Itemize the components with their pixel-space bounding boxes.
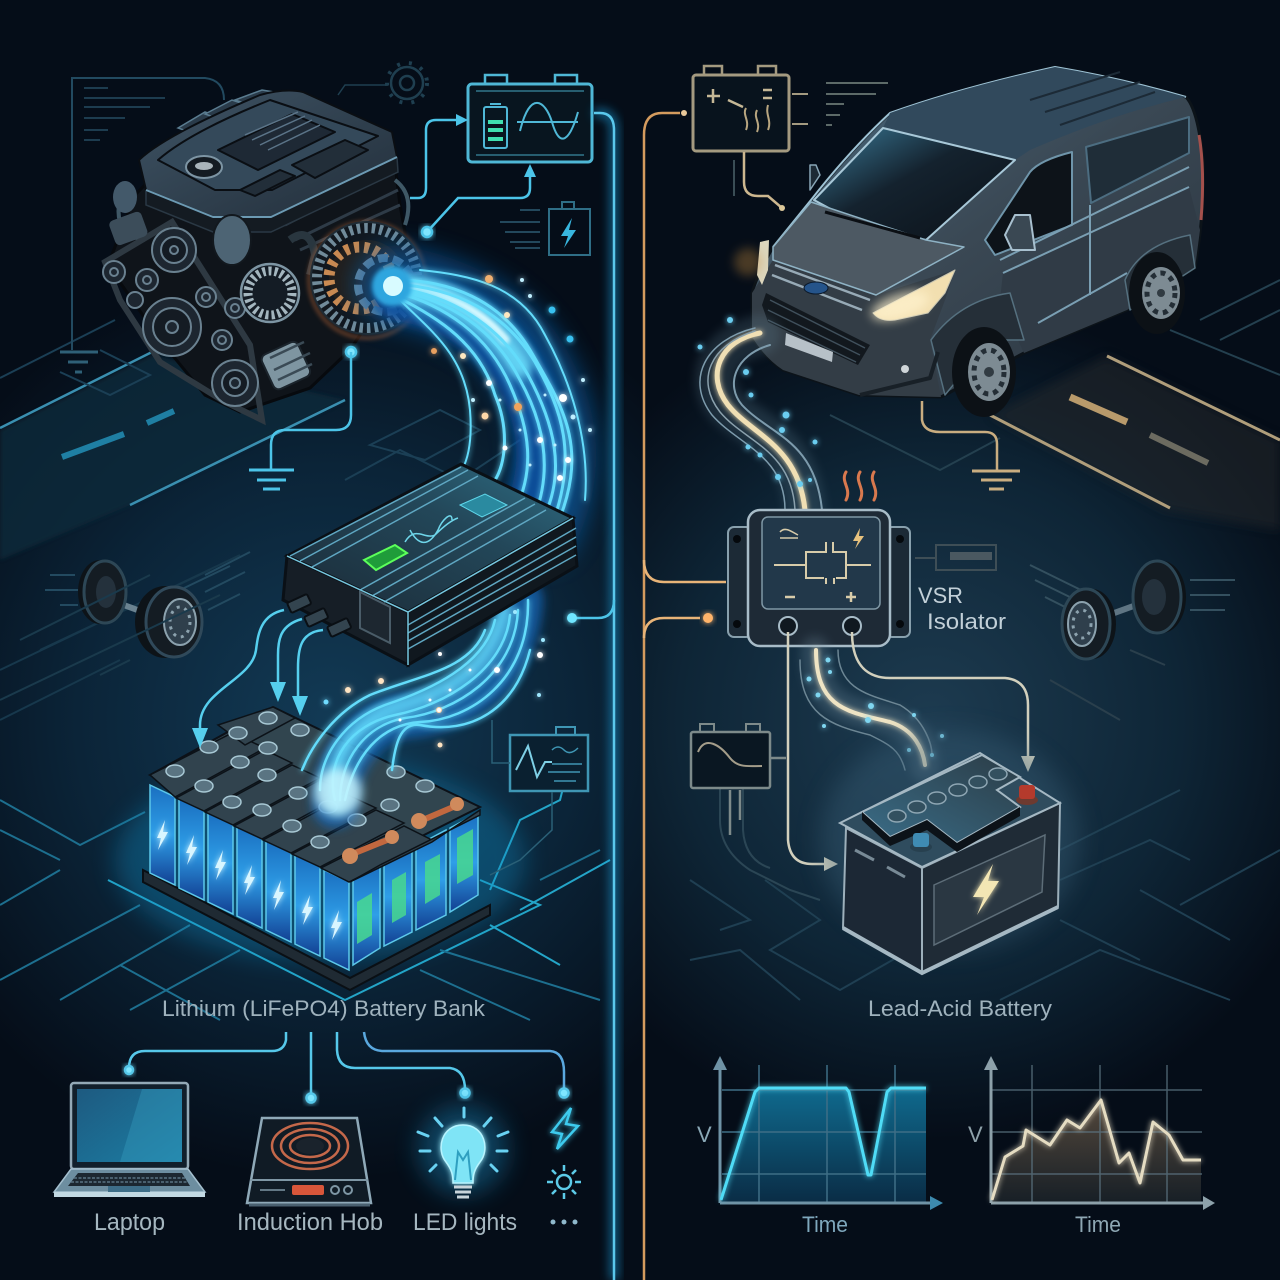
alternator — [311, 222, 423, 334]
chart: lithium voltage: Time — [802, 1212, 848, 1237]
base — [143, 870, 490, 990]
chart: lithium voltage — [697, 1056, 943, 1237]
road and circuit traces left — [0, 320, 610, 1020]
VSR isolator label — [918, 583, 1006, 634]
VSR isolator label: VSR — [918, 583, 963, 608]
VSR isolator — [728, 510, 910, 646]
icon: induction hob — [247, 1118, 371, 1205]
battery outline icon — [460, 494, 507, 517]
left cells — [150, 785, 349, 970]
screen — [762, 517, 880, 609]
icon: laptop — [54, 1083, 205, 1197]
ribs — [290, 467, 576, 649]
load labels — [94, 1209, 517, 1236]
wires from isolator — [788, 632, 1035, 871]
battery right face — [922, 803, 1060, 973]
connector to ground left — [249, 347, 356, 489]
main blue line — [567, 113, 614, 1280]
lead-acid battery — [820, 730, 1080, 973]
headlights — [873, 270, 955, 320]
flanges — [728, 527, 910, 637]
data monitor icon — [490, 720, 588, 875]
sparks right lower — [806, 658, 944, 757]
icon: LED bulb — [418, 1105, 508, 1197]
schematic sheet top left — [60, 78, 224, 372]
inverter charger — [283, 464, 577, 665]
engine — [103, 90, 425, 420]
icon: bolt — [552, 1108, 578, 1149]
van side lines — [1000, 167, 1189, 323]
alternator glow — [309, 222, 425, 338]
load labels: Laptop — [94, 1209, 165, 1236]
roof — [883, 67, 1186, 160]
cell tops — [150, 707, 480, 882]
wave icon — [405, 516, 458, 542]
copper bus bars — [342, 797, 464, 864]
load wiring — [125, 1032, 568, 1102]
port — [360, 592, 390, 643]
icon: small battery with bolt — [500, 202, 590, 255]
VSR isolator label: Isolator — [927, 609, 1006, 634]
serpentine belt — [105, 222, 262, 420]
cables to battery — [192, 610, 323, 748]
icon box: heat sensor — [693, 66, 888, 211]
bolts — [157, 820, 342, 940]
lead battery label: Lead-Acid Battery — [868, 996, 1052, 1021]
rear wheel — [1129, 252, 1185, 334]
energy stream right upper — [700, 328, 822, 510]
lithium battery label: Lithium (LiFePO4) Battery Bank — [162, 996, 486, 1021]
lower side — [1000, 187, 1200, 353]
energy stream lower — [302, 600, 530, 816]
chart: lead-acid voltage — [968, 1056, 1215, 1237]
side windows — [985, 152, 1072, 255]
right road and traces — [690, 280, 1280, 1000]
side face — [408, 518, 577, 665]
battery left face — [843, 828, 922, 973]
bolt — [973, 864, 999, 915]
connectors — [287, 594, 352, 637]
front wheel — [952, 327, 1016, 417]
wheels left — [0, 552, 250, 700]
wheel arches — [931, 235, 1195, 395]
tail light — [1199, 135, 1203, 220]
starter — [260, 340, 312, 391]
small alternator — [241, 264, 299, 322]
metal parts — [113, 181, 137, 213]
bonnet — [773, 202, 964, 295]
chart: lithium voltage: V — [697, 1122, 712, 1147]
bumper — [752, 260, 955, 397]
top face — [287, 464, 573, 612]
energy stream upper — [372, 266, 586, 530]
pulleys — [103, 228, 258, 406]
top surface — [150, 707, 480, 872]
wiper — [825, 212, 920, 238]
icon box: battery and waveform — [468, 75, 592, 162]
lithium battery bank — [115, 707, 525, 990]
mirror — [1005, 215, 1035, 250]
connector to icon box — [410, 114, 536, 237]
energy stream right lower — [800, 650, 932, 770]
load labels: LED lights — [413, 1209, 517, 1236]
terminals — [779, 617, 861, 635]
windshield — [814, 128, 1015, 240]
caps — [888, 768, 1007, 822]
end face — [283, 556, 408, 665]
icon: more dots — [550, 1220, 578, 1224]
cover ridges — [178, 90, 280, 134]
engine cover — [139, 91, 397, 217]
right cells — [353, 813, 478, 965]
van body — [752, 67, 1203, 397]
base rim — [843, 907, 1058, 973]
icon: heat waves — [844, 472, 876, 500]
green battery icon — [364, 545, 407, 570]
grille — [762, 293, 870, 365]
fuse icon — [915, 545, 996, 570]
green charge bars — [357, 829, 473, 944]
chart: lead-acid voltage: Time — [1075, 1212, 1121, 1237]
sparks lower — [324, 610, 545, 748]
circuit symbol — [774, 528, 871, 602]
connector to ground right — [922, 401, 1020, 489]
sparks upper — [431, 275, 592, 481]
battery top — [840, 753, 1060, 867]
van — [734, 67, 1203, 417]
lead battery chart icon — [691, 724, 786, 835]
sparks right — [698, 317, 818, 487]
terminals — [166, 712, 434, 848]
engine body — [108, 140, 410, 412]
terminal negative — [910, 833, 932, 852]
chart: lead-acid voltage: V — [968, 1122, 983, 1147]
load labels: Induction Hob — [237, 1209, 383, 1236]
wheels right — [1030, 561, 1235, 720]
terminal positive — [1016, 785, 1038, 805]
icon: sun — [547, 1165, 581, 1199]
icon: gear — [338, 63, 427, 103]
body — [748, 510, 890, 646]
number plate — [785, 333, 833, 362]
cover lower lip — [146, 157, 398, 232]
main orange line — [644, 110, 726, 1280]
